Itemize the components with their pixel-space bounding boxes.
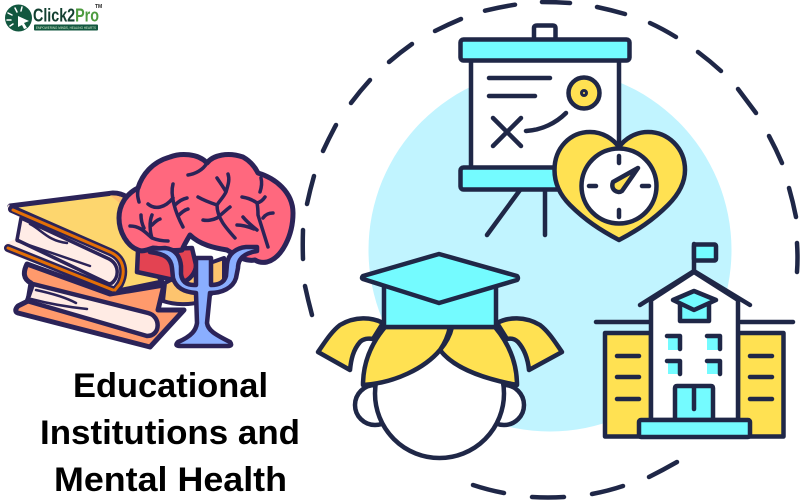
icon: school building [596, 244, 793, 437]
icon: student girl with graduation cap [318, 254, 562, 458]
title: Institutions and [40, 414, 300, 452]
light blue background circle [368, 68, 732, 432]
logo: Click2Pro [33, 6, 99, 26]
icon: presentation board with heart clock [460, 26, 685, 240]
lower book [16, 264, 184, 347]
brain stem [137, 248, 196, 282]
peach book behind psi [163, 258, 224, 304]
clock [582, 148, 656, 224]
dashed ring [303, 2, 798, 498]
icon: books and brain with psi symbol [5, 155, 293, 347]
logo: EMPOWERING MINDS, HEALING HEARTS [36, 25, 96, 30]
brain [119, 155, 293, 262]
psi symbol [150, 247, 257, 346]
title: Educational [73, 367, 268, 405]
title: Mental Health [54, 461, 287, 499]
logo: TM [95, 4, 102, 10]
upper book pages and orange spine [5, 204, 123, 292]
logo [5, 4, 102, 32]
heart [554, 132, 685, 240]
title [40, 367, 300, 499]
upper book yellow cover [10, 193, 162, 291]
